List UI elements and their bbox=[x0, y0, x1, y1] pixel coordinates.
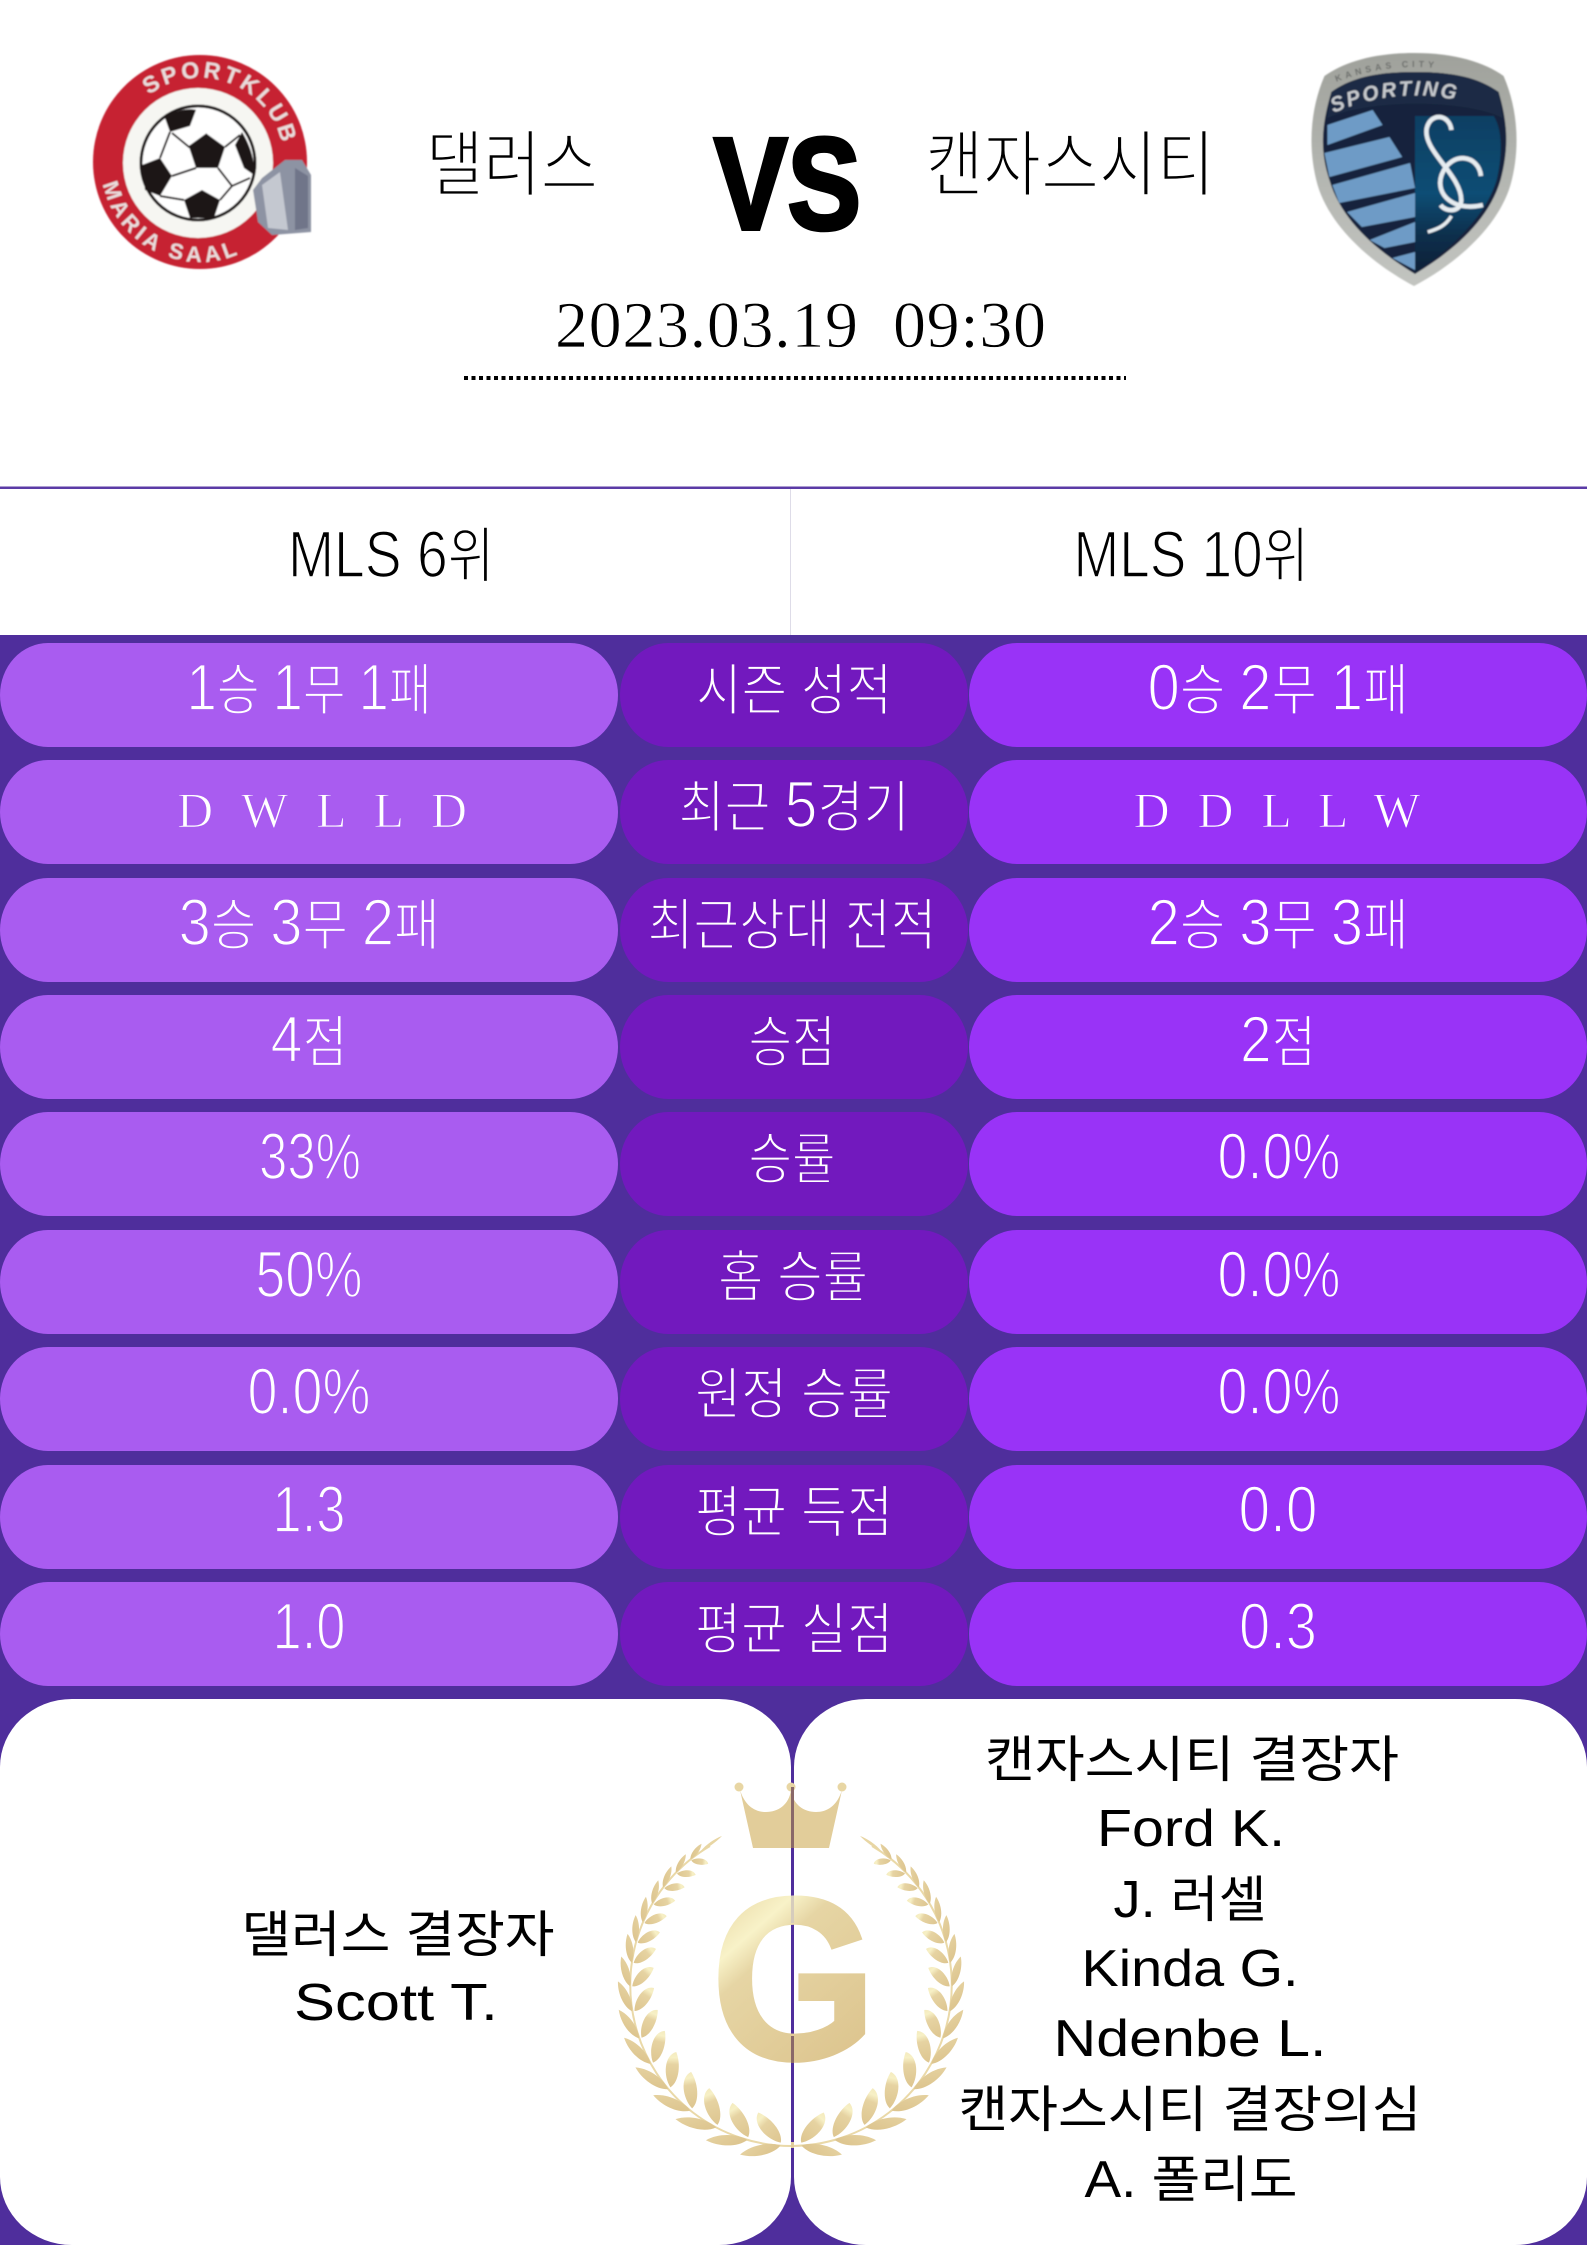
row: goals for bbox=[0, 1465, 1587, 1569]
row: win rate bbox=[0, 1112, 1587, 1216]
standing: Dallas: MLS 6위 bbox=[288, 508, 494, 595]
team name: Dallas: 댈러스 bbox=[426, 106, 598, 211]
panel: Kansas City absentees: J. 러셀 bbox=[1114, 1860, 1266, 1932]
team name: Kansas City: 캔자스시티 bbox=[926, 106, 1214, 211]
row: away win rate: 0.0% bbox=[248, 1354, 370, 1428]
row: win rate: 33% bbox=[259, 1119, 361, 1193]
row: goals against: 0.3 bbox=[1239, 1589, 1317, 1663]
header: match-up bbox=[92, 52, 1518, 362]
row: points: 승점 bbox=[748, 998, 836, 1079]
panel: Dallas absentees: 댈러스 결장자 bbox=[242, 1895, 554, 1967]
laurel wreath bbox=[617, 1836, 965, 2158]
letter G: G bbox=[711, 1850, 877, 2109]
panel: Kansas City absentees: Ford K. bbox=[1097, 1800, 1285, 1858]
icon: home team crest (Sportklub Maria Saal): MARIA SAAL bbox=[102, 180, 238, 264]
row: win rate: 0.0% bbox=[1218, 1119, 1340, 1193]
icon: gold crown and laurel G emblem bbox=[617, 1782, 965, 2158]
icon: home team crest (Sportklub Maria Saal): SPORTKLUB bbox=[142, 60, 296, 142]
stats table bbox=[0, 643, 1587, 1686]
row: last five matches: 최근 5경기 bbox=[678, 763, 910, 844]
row: home win rate bbox=[0, 1230, 1587, 1334]
row: last five matches: D D L L W bbox=[1134, 782, 1421, 838]
dotted rule bbox=[464, 376, 1126, 380]
icon: away team crest (Sporting Kansas City) bbox=[1310, 52, 1518, 286]
row: goals for: 1.3 bbox=[272, 1472, 346, 1546]
VS mark: VS bbox=[714, 110, 861, 257]
row: goals against: 평균 실점 bbox=[695, 1585, 893, 1666]
panel: Kansas City absentees: Kinda G. bbox=[1082, 1940, 1298, 1998]
row: home win rate: 홈 승률 bbox=[718, 1233, 868, 1314]
row: points: 4점 bbox=[270, 998, 348, 1079]
row: goals for: 평균 득점 bbox=[695, 1468, 893, 1549]
row: head to head: 최근상대 전적 bbox=[648, 881, 936, 962]
panel: Dallas absentees bbox=[0, 1699, 791, 2245]
row: head to head bbox=[0, 878, 1587, 982]
panel: Dallas absentees: Scott T. bbox=[294, 1974, 498, 2032]
row: points: 2점 bbox=[1240, 998, 1316, 1079]
row: home win rate: 50% bbox=[256, 1237, 362, 1311]
row: goals against: 1.0 bbox=[272, 1589, 346, 1663]
crown bbox=[734, 1782, 846, 1848]
overlap strip tint bbox=[791, 1787, 794, 1848]
row: season record: 1승 1무 1패 bbox=[186, 646, 432, 727]
panel: Kansas City absentees bbox=[794, 1699, 1587, 2245]
icon: away team crest (Sporting Kansas City): SPORTING bbox=[1330, 80, 1458, 113]
row: points bbox=[0, 995, 1587, 1099]
row: season record bbox=[0, 643, 1587, 747]
panel: Kansas City absentees: 캔자스시티 결장의심 bbox=[958, 2070, 1422, 2142]
panel: Kansas City absentees: A. 폴리도 bbox=[1084, 2140, 1298, 2212]
league standings band bbox=[0, 486, 1587, 635]
row: away win rate: 0.0% bbox=[1218, 1354, 1340, 1428]
match date and time: 2023.03.19 09:30 bbox=[555, 289, 1046, 362]
row: home win rate: 0.0% bbox=[1218, 1237, 1340, 1311]
panel: Kansas City absentees: 캔자스시티 결장자 bbox=[985, 1720, 1399, 1792]
icon: away team crest (Sporting Kansas City): KANSAS CITY bbox=[1334, 60, 1434, 82]
row: last five matches bbox=[0, 760, 1587, 864]
row: away win rate: 원정 승률 bbox=[695, 1350, 893, 1431]
row: season record: 0승 2무 1패 bbox=[1148, 646, 1408, 727]
panel: Kansas City absentees: Ndenbe L. bbox=[1054, 2010, 1326, 2068]
row: win rate: 승률 bbox=[748, 1115, 836, 1196]
row: goals against bbox=[0, 1582, 1587, 1686]
row: goals for: 0.0 bbox=[1238, 1472, 1318, 1546]
stats panel background bbox=[0, 635, 1587, 2245]
icon: home team crest (Sportklub Maria Saal) bbox=[92, 54, 312, 270]
row: season record: 시즌 성적 bbox=[696, 646, 892, 727]
standing: Kansas City: MLS 10위 bbox=[1074, 508, 1308, 595]
row: last five matches: D W L L D bbox=[177, 782, 467, 838]
row: head to head: 2승 3무 3패 bbox=[1148, 881, 1408, 962]
row: away win rate bbox=[0, 1347, 1587, 1451]
row: head to head: 3승 3무 2패 bbox=[178, 881, 440, 962]
